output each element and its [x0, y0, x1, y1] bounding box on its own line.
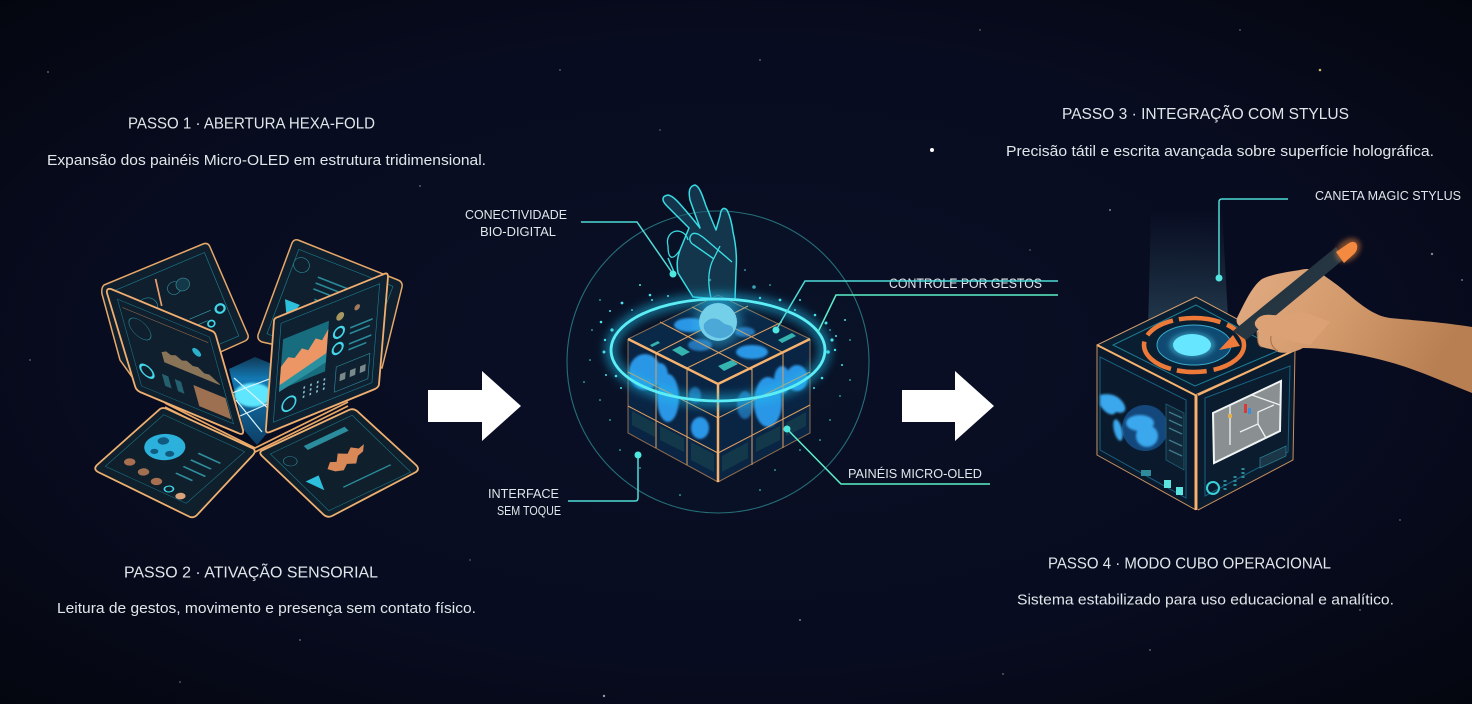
- projection beam: [1148, 210, 1228, 330]
- center cube top glowing: [229, 357, 272, 445]
- thumb over stylus: [1255, 312, 1330, 345]
- orb glow: [694, 298, 742, 346]
- cube body: [628, 295, 810, 482]
- tablet: front right: [266, 273, 388, 432]
- particle cloud: [583, 269, 851, 496]
- lower control panels: [632, 411, 806, 472]
- callout: paineis micro-oled: [784, 426, 990, 484]
- orb: [699, 303, 737, 341]
- tablet: back left: [102, 243, 248, 388]
- text: passo 1 description: Expansão dos painéis Micro-OLED em estrutura tridimensional.: [47, 152, 486, 169]
- hand holding stylus: [1219, 233, 1472, 393]
- callout: controle por gestos: CONTROLE POR GESTOS: [889, 276, 1042, 291]
- panel: operational cube: [1096, 210, 1295, 510]
- callout: interface sem toque: [488, 452, 642, 518]
- grid thin: [628, 306, 810, 465]
- orb continents: [704, 318, 733, 338]
- text: passo 4 description: Sistema estabilizado para uso educacional e analítico.: [1017, 592, 1394, 608]
- tablet: back right: [258, 240, 402, 371]
- callout: conectividade bio-digital: BIO-DIGITAL: [480, 224, 556, 239]
- callout: caneta magic stylus: CANETA MAGIC STYLUS: [1315, 188, 1461, 203]
- callout: controle por gestos: [772, 276, 1058, 334]
- tablet: bottom left: [95, 408, 255, 517]
- map glow: [629, 318, 808, 439]
- floor plan screen: [1213, 381, 1281, 463]
- tablet: front left: [107, 289, 243, 434]
- arrow 1: [428, 371, 521, 441]
- callout: conectividade bio-digital: CONECTIVIDADE: [465, 207, 567, 222]
- callout: paineis micro-oled: PAINÉIS MICRO-OLED: [848, 466, 982, 481]
- outer orbit circle: [567, 211, 869, 513]
- fingers under stylus: [1258, 332, 1278, 351]
- callout: conectividade bio-digital: [465, 207, 676, 278]
- arm and hand back: [1237, 269, 1472, 393]
- heading: passo 2: PASSO 2 · ATIVAÇÃO SENSORIAL: [124, 562, 378, 582]
- glow ring halo: [611, 299, 825, 401]
- outer edges: [628, 295, 810, 482]
- stylus body: [1233, 247, 1344, 340]
- heading: passo 4: PASSO 4 · MODO CUBO OPERACIONAL: [1048, 556, 1331, 572]
- holographic hand: [663, 185, 736, 300]
- panel: sensor cube: [567, 185, 869, 513]
- callout: interface sem toque: SEM TOQUE: [497, 503, 561, 518]
- arrow 2: [902, 371, 994, 441]
- panel: hexa-fold unfolded tablets: [95, 240, 418, 517]
- glow ring: [611, 299, 825, 401]
- callout: interface sem toque: INTERFACE: [488, 486, 559, 501]
- heading: passo 3: PASSO 3 · INTEGRAÇÃO COM STYLUS: [1062, 103, 1349, 123]
- center edge: [1194, 395, 1198, 510]
- stylus cap: [1336, 242, 1357, 263]
- text: passo 3 description: Precisão tátil e escrita avançada sobre superfície holográfica.: [1006, 143, 1434, 160]
- tablet: bottom right: [260, 409, 418, 517]
- top cells: [650, 333, 796, 371]
- bright edges: [628, 339, 810, 482]
- stylus nib: [1219, 335, 1240, 350]
- text: passo 2 description: Leitura de gestos, movimento e presença sem contato físico.: [57, 600, 476, 617]
- cube top face: [1097, 297, 1295, 395]
- heading: passo 1: PASSO 1 · ABERTURA HEXA-FOLD: [128, 116, 375, 132]
- hinge strips: [165, 402, 348, 452]
- globe map: [1100, 394, 1158, 447]
- cube right face: [1198, 350, 1295, 510]
- stylus cap glow: [1331, 233, 1365, 267]
- cube left face: [1096, 345, 1196, 510]
- callout: caneta magic stylus: [1216, 188, 1461, 282]
